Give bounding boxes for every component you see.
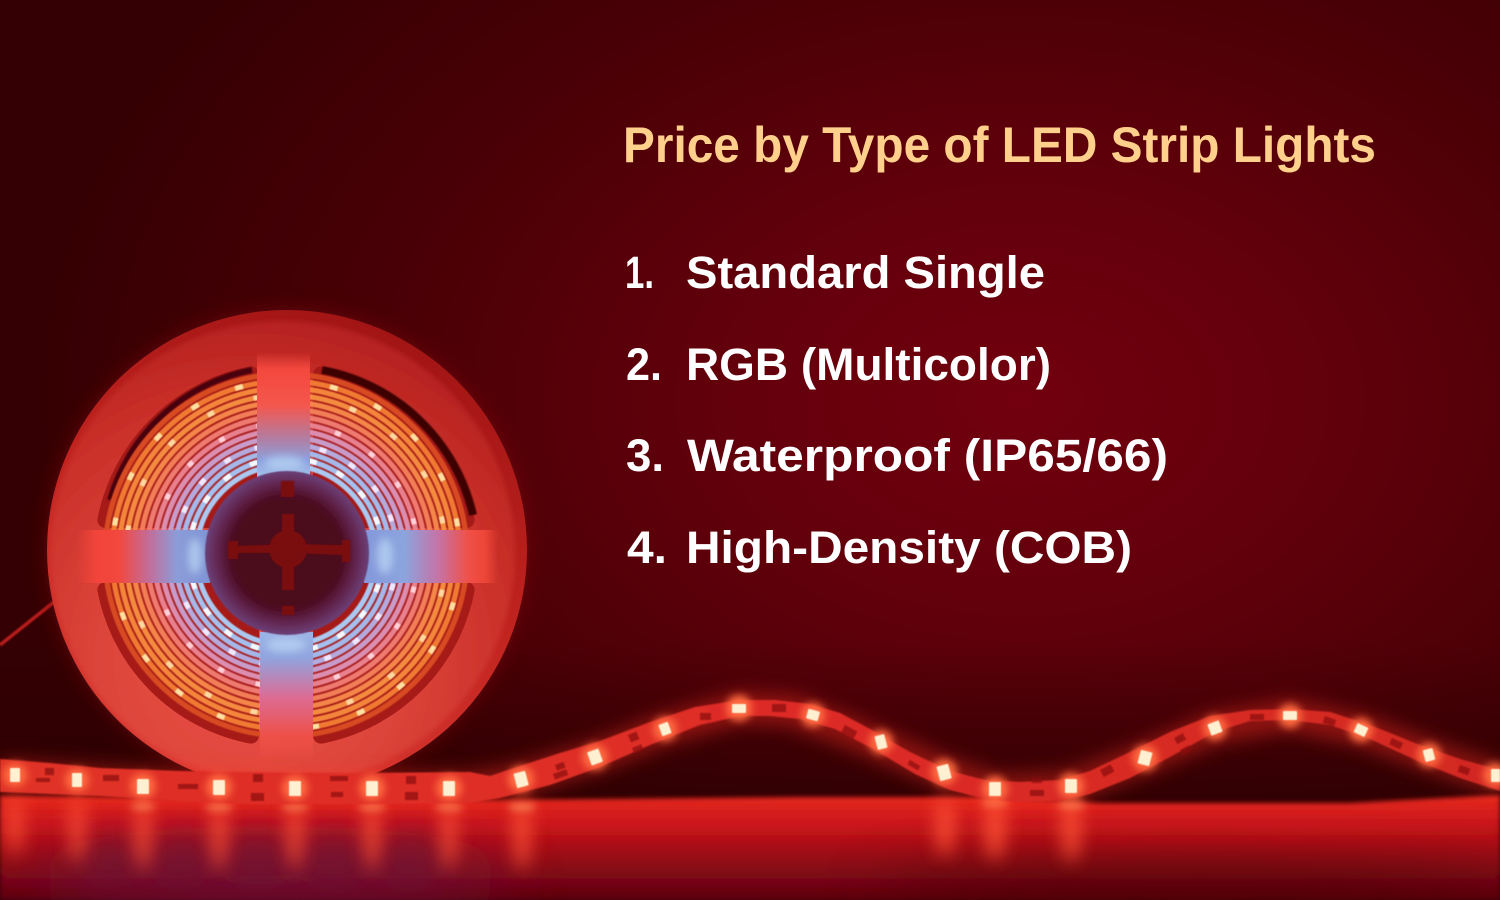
LED dots on the tape xyxy=(112,381,460,729)
bright contact points under the strip xyxy=(131,800,1085,810)
LED chips xyxy=(10,704,1500,796)
dark arches between LED reflections xyxy=(80,830,440,886)
numbered list of strip types xyxy=(625,247,1168,573)
bottom spoke xyxy=(260,632,313,762)
floor shade: dark corner right xyxy=(870,873,1500,900)
item 4 label: High-Density (COB) xyxy=(686,522,1132,573)
reel glow xyxy=(44,307,530,793)
floor with red reflection xyxy=(0,790,1500,900)
item 1 label: Standard Single xyxy=(686,247,1045,298)
strip body xyxy=(0,700,1500,804)
reel hub xyxy=(205,471,369,635)
LED halos xyxy=(3,695,1500,802)
item 2 number: 2. xyxy=(626,339,662,390)
item 2 label: RGB (Multicolor) xyxy=(686,339,1051,390)
hub cross xyxy=(228,481,350,615)
cable xyxy=(0,602,54,645)
reel face xyxy=(51,321,515,785)
item 3 number: 3. xyxy=(626,430,664,481)
dark shadow upper right window xyxy=(322,370,473,515)
LED strip xyxy=(0,695,1500,804)
dark shadow in upper left window xyxy=(110,370,252,500)
left spoke xyxy=(76,530,210,583)
strip glow xyxy=(0,708,1500,790)
reel rim xyxy=(47,310,527,790)
item 3 label: Waterproof (IP65/66) xyxy=(687,430,1168,481)
floor shade: purple haze under the reel xyxy=(30,846,510,900)
LED reel xyxy=(44,307,530,793)
dark band above the floor xyxy=(0,640,1500,805)
spoke light spots xyxy=(188,456,393,652)
title: Price by Type of LED Strip Lights xyxy=(623,117,1376,173)
wound LED tape rings xyxy=(105,374,467,736)
item 4 number: 4. xyxy=(627,522,667,573)
circuit markings on strip xyxy=(36,704,1470,801)
item 1 number: 1. xyxy=(625,247,654,298)
LED reflections on the floor xyxy=(8,790,1080,870)
right spoke xyxy=(364,530,498,583)
reel windows xyxy=(105,374,467,736)
top spoke xyxy=(257,352,310,478)
